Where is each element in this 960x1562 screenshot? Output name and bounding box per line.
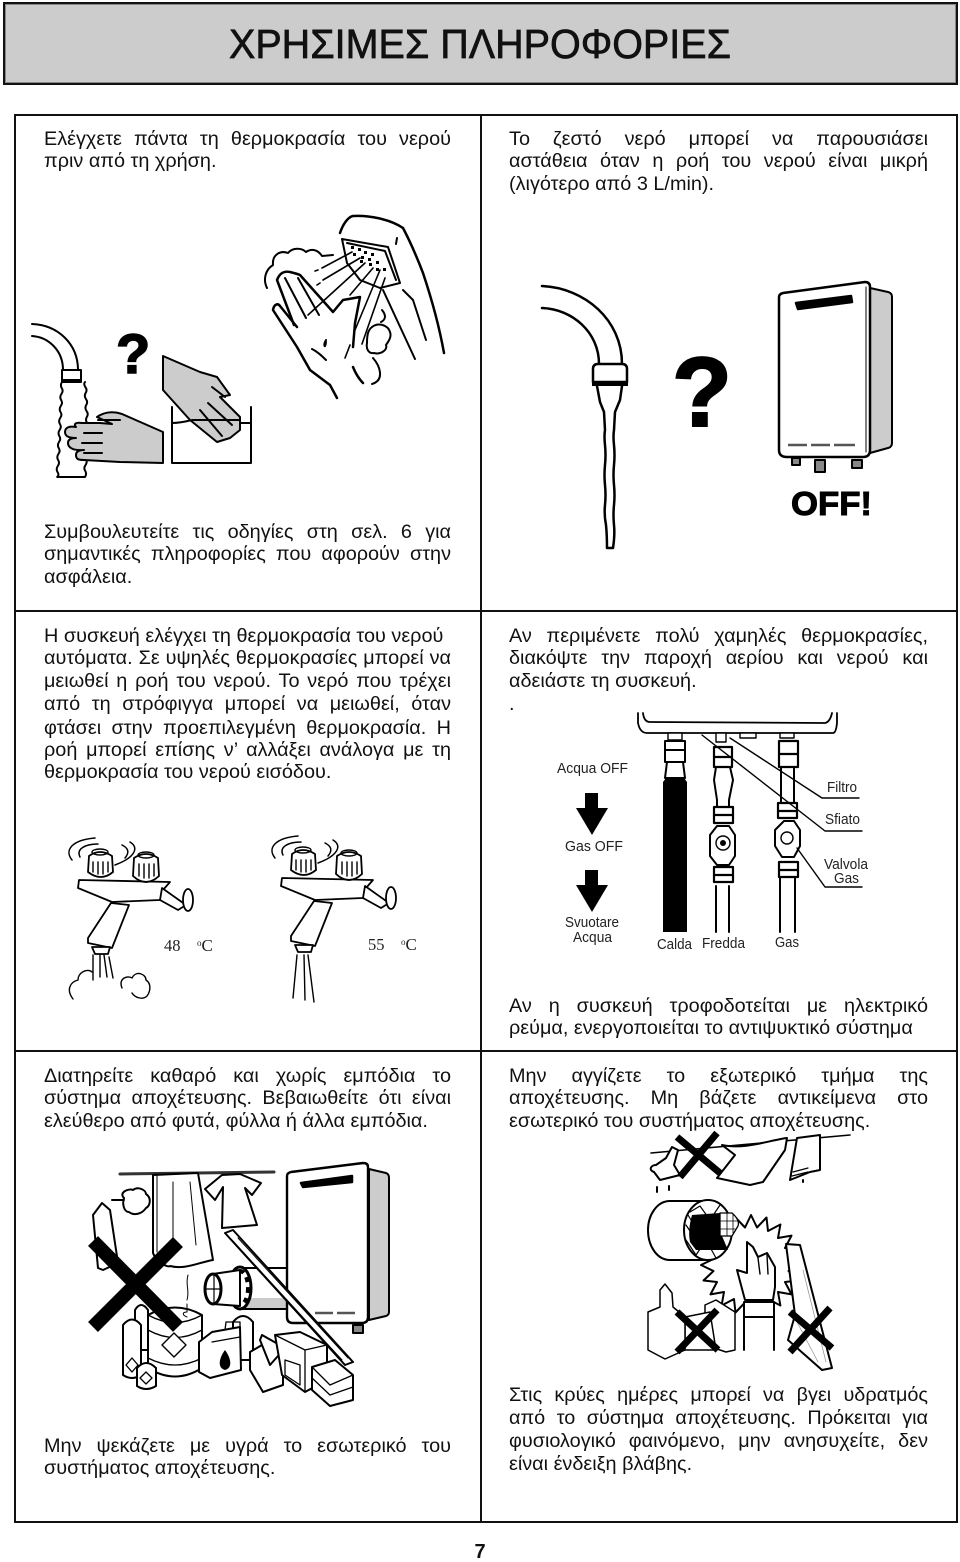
vent pipe	[240, 1268, 287, 1309]
label drain water: Acqua	[573, 930, 613, 946]
text: low temperatures: διακόψτε την παροχή αερίου και νερού και	[509, 647, 928, 669]
drum	[148, 1308, 202, 1376]
question mark: ?	[116, 322, 150, 385]
text: do not touch exhaust: αποχέτευσης. Μη βάζετε αντικείμενα στο	[509, 1087, 928, 1109]
illustration: low-flow faucet	[542, 286, 732, 548]
mirror board	[786, 1244, 832, 1370]
text: check water temperature	[44, 128, 451, 172]
label gas valve: Valvola	[824, 857, 869, 873]
text: keep exhaust clear	[44, 1065, 451, 1132]
text: do not spray liquids: Μην ψεκάζετε με υγρά το εσωτερικό του	[44, 1435, 451, 1457]
text: cold day steam	[509, 1384, 928, 1475]
shirt on line	[717, 1138, 787, 1185]
text: safety reference: Συμβουλευτείτε τις οδηγίες στη σελ. 6 για	[44, 521, 451, 543]
text: hot water instability: (λιγότερο από 3 L/min).	[509, 173, 714, 195]
text: hot water instability: αστάθεια όταν η ροή του νερού είναι μικρή	[509, 150, 928, 172]
question mark large: ?	[672, 337, 732, 447]
text: low temperatures	[509, 625, 928, 715]
text: do not touch exhaust: εσωτερικό του συστήματος αποχέτευσης.	[509, 1110, 870, 1132]
cross on bottles	[677, 1310, 718, 1352]
row divider upper	[14, 610, 958, 612]
text: low temperatures: .	[509, 693, 515, 715]
column divider	[480, 114, 482, 1523]
tissue box	[250, 1345, 283, 1392]
cans	[135, 1305, 148, 1350]
label filter: Filtro	[827, 780, 857, 796]
text: automatic temperature control: αυτόματα. Σε υψηλές θερμοκρασίες μπορεί να	[44, 647, 451, 669]
text: check water temperature: πριν από τη χρήση.	[44, 150, 216, 172]
text: automatic temperature control: θερμοκρασία του νερού εισόδου.	[44, 761, 331, 783]
cardboard box	[275, 1332, 327, 1392]
illustration: hands under shower head	[265, 216, 444, 398]
text: low temperatures: Αν περιμένετε πολύ χαμηλές θερμοκρασίες,	[509, 625, 928, 647]
cold water pipe	[710, 747, 735, 932]
label gas valve: Gas	[834, 871, 859, 887]
hanging cloth	[153, 1173, 213, 1267]
text: automatic temperature control: μειωθεί η ροή του νερού. Το νερό που τρέχει	[44, 670, 451, 692]
text: automatic temperature control: φτάσει στην προεπιλεγμένη θερμοκρασία. Η	[44, 717, 451, 739]
text: automatic temperature control: ροή μπορεί επίσης ν’ αλλάξει ανάλογα με τη	[44, 739, 451, 761]
label gas: Gas	[775, 935, 799, 951]
glove	[651, 1147, 680, 1180]
text: automatic temperature control: Η συσκευή ελέγχει τη θερμοκρασία του νερού	[44, 625, 443, 647]
wooden board	[225, 1230, 353, 1365]
text: hot water instability: Το ζεστό νερό μπορεί να παρουσιάσει	[509, 128, 928, 150]
text: do not spray liquids: συστήματος αποχέτευσης.	[44, 1457, 275, 1479]
arrow down 2	[576, 870, 608, 912]
text: keep exhaust clear: Διατηρείτε καθαρό και χωρίς εμπόδια το	[44, 1065, 451, 1087]
starburst	[701, 1215, 801, 1315]
text: safety reference: σημαντικές πληροφορίες που αφορούν στην	[44, 543, 451, 565]
illustration: faucet with hands testing water	[32, 322, 251, 477]
hot water pipe	[663, 741, 687, 932]
label drain water	[565, 915, 619, 946]
degree label 55: C	[406, 935, 417, 954]
label hot: Calda	[657, 937, 693, 953]
text: automatic temperature control: από τη στρόφιγγα μπορεί να μειωθεί, όταν	[44, 693, 451, 715]
label gas valve	[824, 857, 869, 887]
t-shirt	[205, 1174, 261, 1228]
text: do not touch exhaust	[509, 1065, 928, 1132]
label gas off: Gas OFF	[565, 839, 623, 855]
temperature label 48: 48	[164, 936, 180, 955]
label vent: Sfiato	[825, 812, 860, 828]
gas pipe	[775, 741, 800, 932]
text: low temperatures: αδειάστε τη συσκευή.	[509, 670, 697, 692]
illustration: obstacles around exhaust with cross	[93, 1163, 389, 1406]
row divider lower	[14, 1050, 958, 1052]
temperature label 55: 55	[368, 935, 384, 954]
title text: ΧΡΗΣΙΜΕΣ ΠΛΗΡΟΦΟΡΙΕΣ	[229, 21, 731, 67]
cross on clothes	[677, 1133, 720, 1177]
text: automatic temperature control	[44, 625, 451, 783]
text: do not touch exhaust: Μην αγγίζετε το εξωτερικό τμήμα της	[509, 1065, 928, 1087]
water heater obstacle	[369, 1169, 389, 1320]
bottles	[705, 1300, 735, 1352]
text: hot water instability	[509, 128, 928, 195]
jerry can	[199, 1327, 241, 1378]
degree label 55: o	[401, 937, 406, 947]
degree label 48: o	[197, 938, 202, 948]
illustration: water heater with OFF	[779, 282, 892, 522]
text: cold day steam: από το σύστημα αποχέτευσης. Πρόκειται για	[509, 1407, 928, 1429]
text: antifreeze system	[509, 995, 928, 1039]
arrow down 1	[576, 793, 608, 835]
illustration: tap at 48 degrees with steam	[69, 838, 213, 999]
text: keep exhaust clear: σύστημα αποχέτευσης. Βεβαιωθείτε ότι είναι	[44, 1087, 451, 1109]
text: keep exhaust clear: ελεύθερο από φυτά, φύλλα ή άλλα εμπόδια.	[44, 1110, 428, 1132]
degree label 48: C	[202, 936, 213, 955]
text: check water temperature: Ελέγχετε πάντα τη θερμοκρασία του νερού	[44, 128, 451, 150]
OFF label: OFF!	[791, 485, 872, 522]
text: antifreeze system: ρεύμα, ενεργοποιείται το αντιψυκτικό σύστημα	[509, 1017, 913, 1039]
text: safety reference	[44, 521, 451, 588]
towel on line	[790, 1135, 820, 1180]
text: safety reference: ασφάλεια.	[44, 566, 132, 588]
label cold: Fredda	[702, 936, 746, 952]
text: cold day steam: είναι ένδειξη βλάβης.	[509, 1453, 692, 1475]
text: cold day steam: Στις κρύες ημέρες μπορεί να βγει υδρατμός	[509, 1384, 928, 1406]
spray can	[93, 1203, 118, 1270]
stack of books	[312, 1360, 353, 1406]
illustration: tap at 55 degrees	[272, 836, 417, 1002]
title banner	[3, 2, 958, 85]
cross on board	[790, 1308, 832, 1352]
text: do not spray liquids	[44, 1435, 451, 1479]
exhaust cylinder	[648, 1201, 708, 1260]
text: cold day steam: φυσιολογικό φαινόμενο, μην ανησυχείτε, δεν	[509, 1430, 928, 1452]
large cross	[93, 1241, 178, 1327]
illustration: do not touch exhaust with crosses	[648, 1133, 850, 1370]
label drain water: Svuotare	[565, 915, 619, 931]
label water off: Acqua OFF	[557, 761, 628, 777]
illustration: plumbing connections diagram	[557, 713, 869, 953]
text: antifreeze system: Αν η συσκευή τροφοδοτείται με ηλεκτρικό	[509, 995, 928, 1017]
hand reaching	[737, 1242, 775, 1300]
